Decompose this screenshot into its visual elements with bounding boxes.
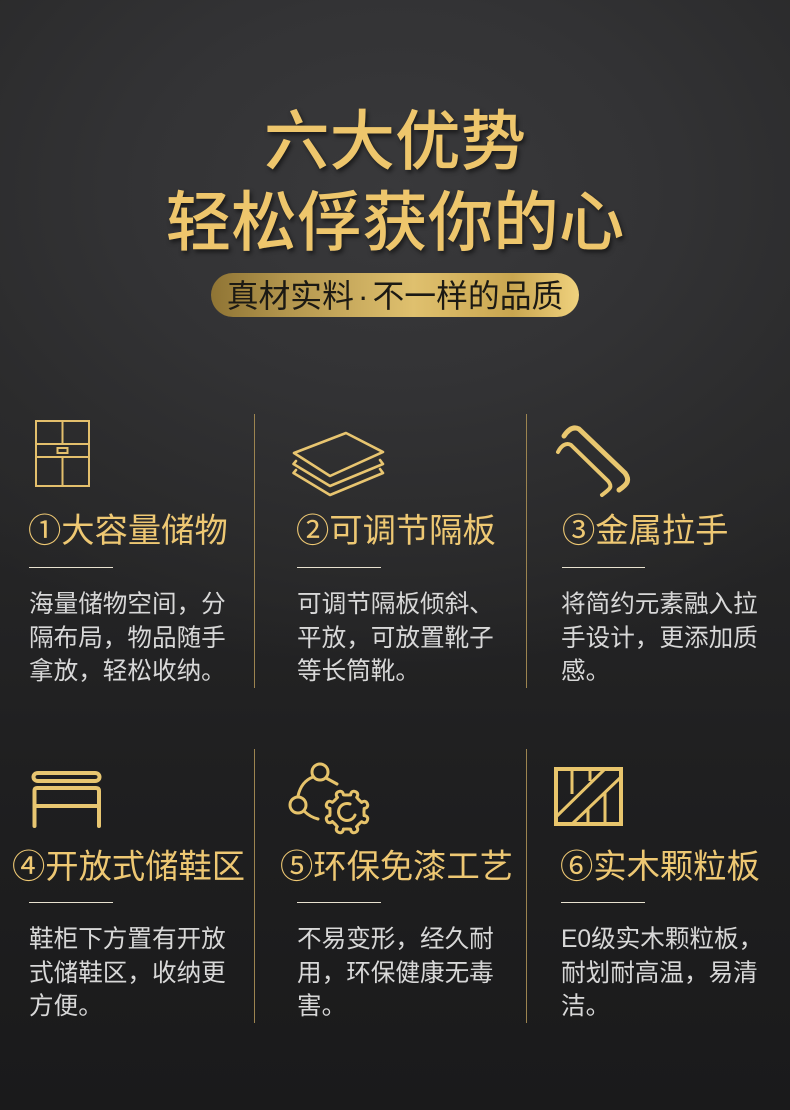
panel: particle board: E0级实木颗粒板， <box>561 926 763 953</box>
panel: particle board: 耐划耐高温，易清 <box>561 960 758 987</box>
icon: wood board <box>554 767 623 826</box>
description <box>297 926 494 1020</box>
panel: metal handle: 感。 <box>561 658 610 685</box>
title <box>166 105 625 259</box>
panel: metal handle: 将简约元素融入拉 <box>561 591 758 618</box>
panel: particle board: 洁。 <box>561 993 610 1020</box>
panel: adjustable shelf: 可调节隔板倾斜、 <box>297 591 494 618</box>
panel: eco paint-free <box>280 762 513 1020</box>
heading: ⑤环保免漆工艺 <box>280 849 513 886</box>
icon: handles <box>556 425 630 498</box>
description <box>297 591 494 685</box>
heading: ④开放式储鞋区 <box>12 849 245 886</box>
heading: ⑥实木颗粒板 <box>560 849 760 886</box>
panel: particle board <box>554 767 763 1020</box>
panel: eco paint-free: 不易变形，经久耐 <box>297 926 494 953</box>
panel: adjustable shelf: 等长筒靴。 <box>297 658 420 685</box>
panel: metal handle <box>556 425 758 685</box>
subtitle pill: 真材实料·不一样的品质 <box>227 278 563 314</box>
panel: eco paint-free: 害。 <box>297 993 346 1020</box>
description <box>29 926 226 1020</box>
description <box>29 591 226 685</box>
panel: adjustable shelf: 平放，可放置靴子 <box>297 625 494 652</box>
panel: open shoe storage <box>12 771 245 1020</box>
panel: large storage: 拿放，轻松收纳。 <box>29 658 226 685</box>
description <box>561 591 758 685</box>
panel: open shoe storage: 方便。 <box>29 993 103 1020</box>
panel: large storage: 海量储物空间，分 <box>29 591 226 618</box>
title: 六大优势 <box>264 105 526 178</box>
description <box>561 926 763 1020</box>
icon: bench <box>32 771 102 828</box>
icon: eco process gear <box>288 762 370 834</box>
icon: stacked boards <box>292 432 384 496</box>
heading: ③金属拉手 <box>562 513 728 550</box>
title: 轻松俘获你的心 <box>166 186 624 259</box>
panel: open shoe storage: 鞋柜下方置有开放 <box>29 926 226 953</box>
panel: metal handle: 手设计，更添加质 <box>561 625 758 652</box>
panel: adjustable shelf <box>292 432 496 685</box>
heading: ①大容量储物 <box>28 513 228 550</box>
panel: large storage: 隔布局，物品随手 <box>29 625 226 652</box>
panel: eco paint-free: 用，环保健康无毒 <box>297 960 494 987</box>
heading: ②可调节隔板 <box>296 513 496 550</box>
icon: wardrobe <box>35 420 90 487</box>
panel: open shoe storage: 式储鞋区，收纳更 <box>29 960 226 987</box>
panel: large storage <box>28 420 228 685</box>
